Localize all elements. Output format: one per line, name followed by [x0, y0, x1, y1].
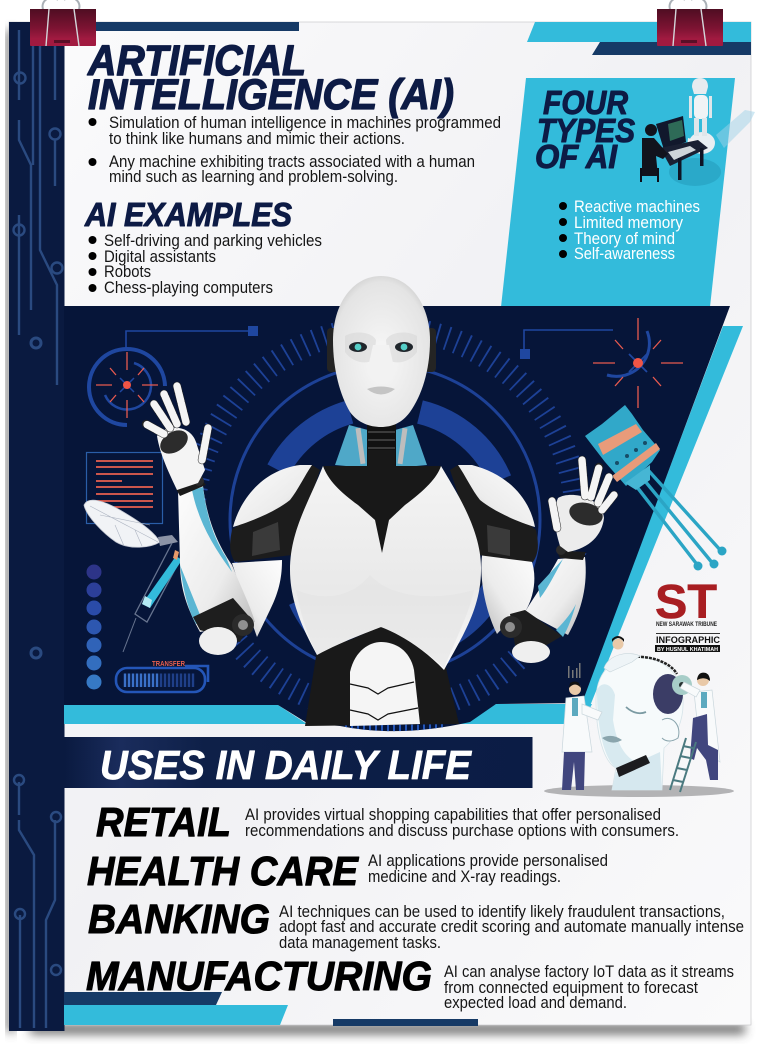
title: ARTIFICIAL	[87, 37, 306, 85]
row: retail	[96, 799, 679, 845]
right palm	[555, 495, 604, 552]
row: banking: AI techniques can be used to identify likely fraudulent transactions,	[279, 903, 725, 921]
row: health care: HEALTH CARE	[87, 848, 360, 894]
icon: cyan probe with swabs	[585, 405, 726, 570]
four types list: Limited memory	[574, 214, 684, 232]
row: retail: AI provides virtual shopping capabilities that offer personalised	[245, 806, 661, 824]
row: banking	[88, 896, 744, 952]
binder clip left	[30, 0, 96, 46]
row: banking: BANKING	[88, 896, 270, 942]
engineer left	[562, 663, 602, 790]
row: manufacturing: MANUFACTURING	[86, 953, 432, 999]
giant head	[596, 657, 692, 790]
robot hips	[305, 626, 459, 726]
row: manufacturing: expected load and demand.	[444, 994, 627, 1012]
intro bullets: to think like humans and mimic their actions.	[109, 130, 405, 148]
transfer gauge: TRANSFER	[152, 659, 185, 668]
robot neck	[335, 418, 427, 480]
AI examples list: Self-driving and parking vehicles	[104, 232, 322, 250]
robot eyes	[349, 342, 413, 352]
panel: four types of AI	[501, 78, 755, 307]
row: health care: AI applications provide personalised	[368, 852, 608, 870]
row: health care: medicine and X-ray readings.	[368, 868, 561, 886]
title	[87, 37, 454, 119]
robot chest shading	[296, 575, 474, 668]
robot shoulders	[230, 465, 538, 562]
title: INTELLIGENCE (AI)	[88, 71, 454, 119]
four types list: Self-awareness	[574, 245, 675, 263]
intro bullets: Simulation of human intelligence in machines programmed	[109, 114, 501, 132]
robot mouth	[367, 386, 395, 394]
engineer right	[680, 673, 720, 780]
panel: dark hero background	[64, 306, 730, 731]
icon: robot and operator at desk	[641, 78, 755, 186]
four types list: Theory of mind	[574, 230, 675, 248]
row: manufacturing: AI can analyse factory IoT data as it streams	[444, 963, 734, 981]
row: retail: recommendations and discuss purchase options with consumers.	[245, 822, 679, 840]
AI examples list: Robots	[104, 263, 151, 281]
left fingers	[146, 386, 208, 460]
robot head	[327, 276, 436, 427]
robot collar	[323, 450, 441, 553]
hud rings	[193, 328, 577, 727]
logo: ST New Sarawak Tribune: NEW SARAWAK TRIBUNE	[656, 621, 717, 628]
top bars	[96, 22, 751, 55]
transfer gauge	[116, 659, 208, 692]
robot right arm and hand	[481, 460, 614, 663]
logo: ST New Sarawak Tribune	[655, 576, 720, 653]
intro bullets	[88, 114, 501, 186]
intro bullets: Any machine exhibiting tracts associated with a human	[109, 153, 475, 171]
cyan accent strips	[64, 326, 743, 724]
gradient dots	[86, 564, 102, 690]
robot torso	[290, 466, 481, 670]
four types list	[559, 198, 700, 263]
logo: ST New Sarawak Tribune: BY HUSNUL KHATIMAH	[657, 647, 718, 653]
AI examples list: Chess-playing computers	[104, 279, 273, 297]
four types heading: OF AI	[535, 138, 618, 175]
icon: insect wing	[84, 500, 178, 547]
row: health care	[87, 848, 608, 894]
four types heading: TYPES	[537, 112, 635, 149]
left circuit band	[9, 22, 64, 1031]
four types list: Reactive machines	[574, 198, 700, 216]
binder clip right	[657, 0, 723, 46]
row: manufacturing	[86, 953, 734, 1012]
ladder	[670, 738, 696, 792]
banner: uses in daily life: USES IN DAILY LIFE	[100, 742, 473, 788]
logo: ST New Sarawak Tribune: INFOGRAPHIC	[656, 635, 720, 646]
intro bullets: mind such as learning and problem-solving.	[109, 168, 398, 186]
row: banking: data management tasks.	[279, 934, 441, 952]
left target hud	[89, 326, 258, 425]
AI examples list: Digital assistants	[104, 248, 216, 266]
right fingers	[552, 460, 614, 528]
document panel	[86, 452, 162, 524]
row: retail: RETAIL	[96, 799, 231, 845]
robot left arm and hand	[146, 386, 282, 655]
AI examples heading: AI EXAMPLES	[84, 196, 292, 233]
robot abdomen panel	[350, 642, 420, 726]
bottom accent bars	[64, 992, 478, 1026]
logo: ST New Sarawak Tribune: ST	[655, 576, 717, 629]
illustration: engineers with giant head	[544, 636, 734, 797]
row: manufacturing: from connected equipment to forecast	[444, 979, 698, 997]
AI examples list	[88, 232, 322, 297]
left palm	[157, 428, 205, 490]
icon: syringe	[123, 543, 182, 652]
engineer top	[604, 636, 640, 672]
four types heading: FOUR	[543, 84, 628, 121]
four types heading	[535, 84, 635, 175]
right target hud	[520, 318, 683, 408]
robot	[146, 276, 614, 726]
